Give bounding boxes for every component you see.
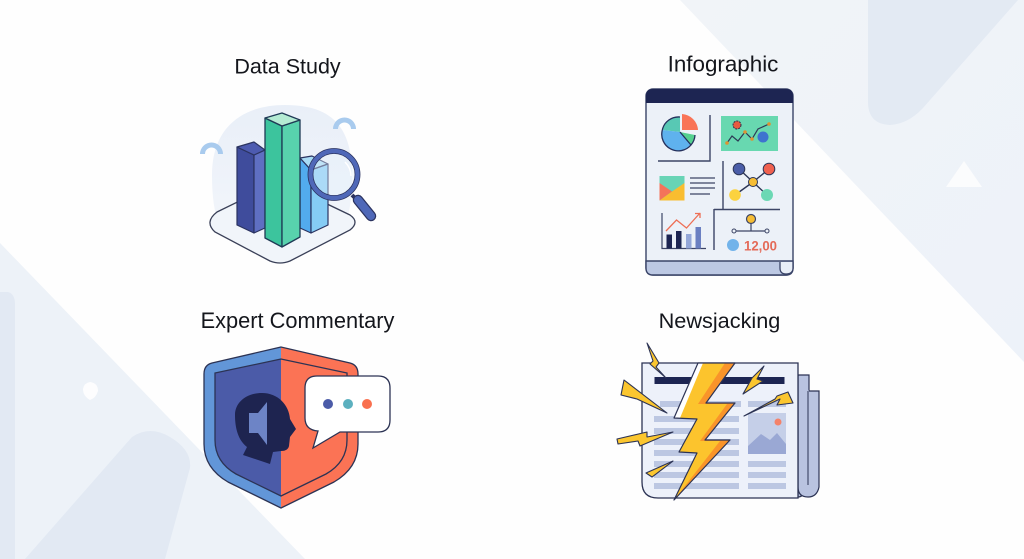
article lines (654, 401, 786, 489)
value widget: 12,00 (744, 238, 777, 254)
title: Infographic: Infographic (668, 52, 778, 76)
line chart card (721, 116, 778, 151)
bar chart (662, 213, 706, 248)
speaker (249, 402, 267, 445)
value widget (727, 214, 777, 254)
pie chart (662, 114, 698, 151)
magnifier (310, 151, 371, 216)
head silhouette (235, 393, 296, 464)
bar: green (265, 113, 300, 247)
icon: newspaper with lightning (617, 343, 819, 500)
speech bubble (305, 376, 390, 448)
bar: dark blue (237, 142, 265, 233)
small lightning sparks (617, 343, 793, 477)
title: Newsjacking: Newsjacking (659, 308, 780, 333)
network diagram (729, 163, 775, 201)
title: Data Study: Data Study (234, 54, 341, 78)
icon: shield with head and speech bubble (204, 347, 390, 508)
title: Expert Commentary: Expert Commentary (201, 308, 395, 333)
bar: light blue (300, 156, 328, 233)
image and text lines (660, 176, 715, 200)
picture (748, 413, 786, 454)
icon: infographic report page (646, 89, 793, 275)
main lightning bolt (674, 363, 735, 500)
icon: data study bar chart with magnifier (200, 105, 371, 263)
